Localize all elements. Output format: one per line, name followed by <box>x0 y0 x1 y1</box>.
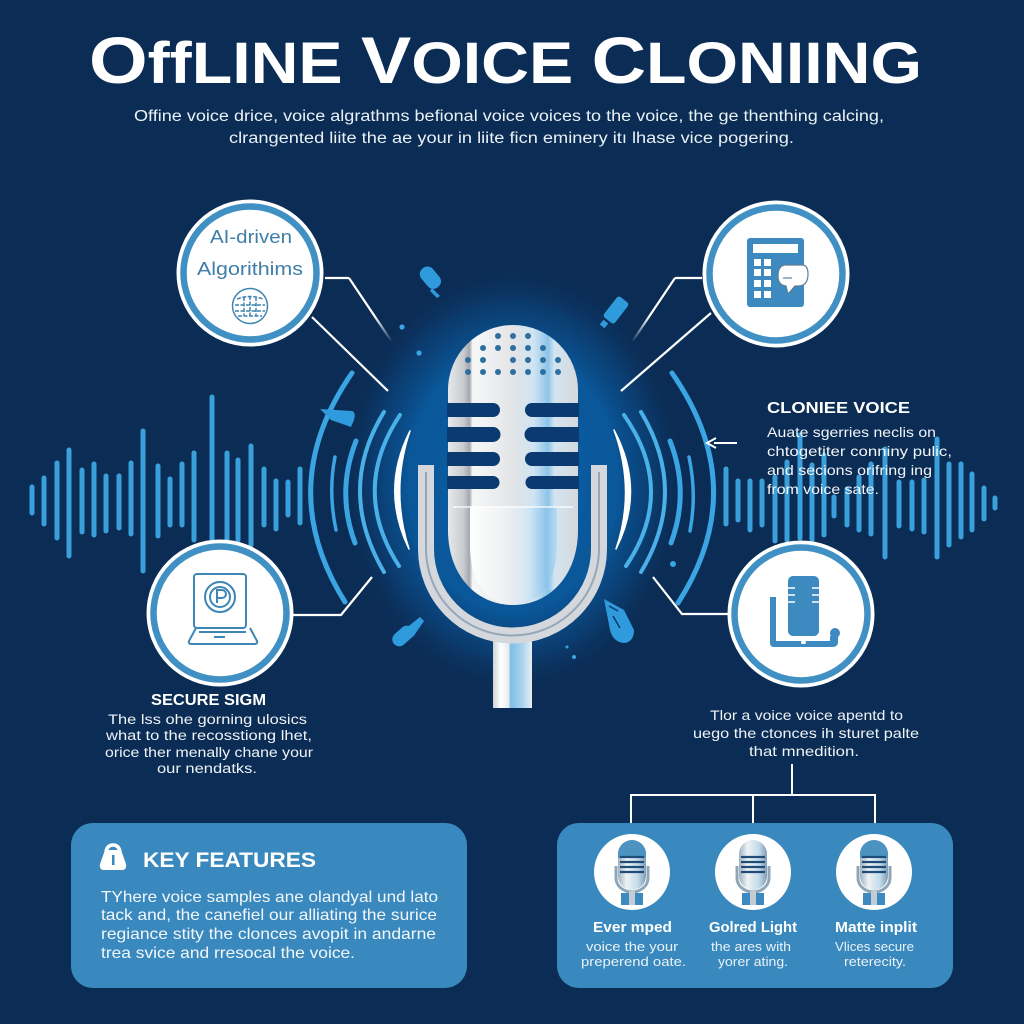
subtitle: clrangented liite the ae your in liite ficn eminery itı lhase vice pogering. <box>229 130 794 147</box>
connector lines <box>293 278 728 615</box>
mic holder <box>426 465 599 636</box>
sound arc: right white <box>614 430 631 549</box>
panel text <box>101 889 438 962</box>
circle: AI-driven algorithms <box>178 201 322 345</box>
central glow <box>338 261 688 699</box>
text block: voice note <box>693 707 919 759</box>
option descriptions: reterecity. <box>844 955 906 969</box>
subtitle: Offine voice drice, voice algrathms befional voice voices to the voice, the ge thenthing calcing, <box>134 108 884 125</box>
mic slats <box>447 403 579 489</box>
circle: phone mic <box>729 542 873 686</box>
text block: secure sign: orice ther menally chane your <box>105 745 314 760</box>
text block: secure sign: our nendatks. <box>157 761 257 776</box>
circle: AI-driven algorithms: Algorithims <box>197 258 303 279</box>
panel text: trea svice and rresocal the voice. <box>101 945 355 962</box>
text block: cloned voice: from voice sate. <box>767 481 879 497</box>
waveform: right <box>726 435 995 557</box>
panel text: tack and, the canefiel our alliating the surice <box>101 907 437 924</box>
option: matte inplit <box>836 834 912 910</box>
circle: laptop <box>148 541 292 685</box>
text block: voice note: that mnedition. <box>749 743 859 759</box>
panel text: regiance stity the clonces avopit in andarne <box>101 926 436 943</box>
option descriptions: the ares with <box>711 940 791 954</box>
text block: secure sign: SECURE SIGM <box>151 692 266 709</box>
microphone <box>426 325 599 708</box>
option labels: Golred Light <box>709 920 797 936</box>
icon: lock <box>100 845 126 870</box>
text block: cloned voice: and secions orifring ing <box>767 462 932 478</box>
panel text: TYhere voice samples ane olandyal und lato <box>101 889 438 906</box>
option labels: Ever mped <box>593 920 672 936</box>
circle: calculator <box>704 202 848 346</box>
scattered small icons <box>320 264 676 659</box>
sound arc: left white <box>395 431 410 549</box>
title: OffLINE VOICE CLONIING <box>89 23 922 97</box>
sound arcs: right <box>624 373 714 603</box>
option descriptions: preperend oate. <box>581 955 686 969</box>
option descriptions: Vlices secure <box>835 940 914 954</box>
option labels: Matte inplit <box>835 920 917 936</box>
text block: cloned voice: Auate sgerries neclis on <box>767 424 936 440</box>
option: golred light <box>715 834 791 910</box>
panel: key features <box>71 823 467 988</box>
mic lower body <box>470 507 557 605</box>
option descriptions: voice the your <box>586 940 678 954</box>
mic stem <box>493 640 532 708</box>
arrow to voice wave <box>707 438 737 448</box>
text block: secure sign: what to the recosstiong lhet, <box>105 728 312 743</box>
text block: voice note: Tlor a voice voice apentd to <box>710 707 903 723</box>
mic seam <box>453 506 573 508</box>
option descriptions <box>581 940 914 969</box>
sound arcs: left <box>311 373 400 602</box>
panel heading: KEY FEATURES <box>143 849 316 872</box>
option: ever mped <box>594 834 670 910</box>
tree connector <box>631 764 875 823</box>
option labels <box>593 920 917 936</box>
text block: cloned voice: chtogetiter conniny pulic, <box>767 443 952 459</box>
option descriptions: yorer ating. <box>718 955 788 969</box>
subtitle <box>134 108 884 147</box>
mic head <box>448 325 578 605</box>
icon: globe <box>232 288 268 324</box>
waveform: left <box>32 397 300 571</box>
text block: cloned voice <box>767 400 952 497</box>
text block: secure sign: The lss ohe gorning ulosics <box>108 712 307 727</box>
text block: secure sign <box>105 692 314 776</box>
circle label: AI-driven <box>210 226 292 247</box>
mic grille dots <box>465 333 561 375</box>
icon: laptop <box>189 574 257 644</box>
icon: phone mic <box>770 576 840 647</box>
panel: voice options <box>557 823 953 988</box>
text block: cloned voice: CLONIEE VOICE <box>767 400 910 417</box>
text block: voice note: uego the ctonces ih sturet palte <box>693 725 919 741</box>
icon: calculator <box>747 238 808 307</box>
